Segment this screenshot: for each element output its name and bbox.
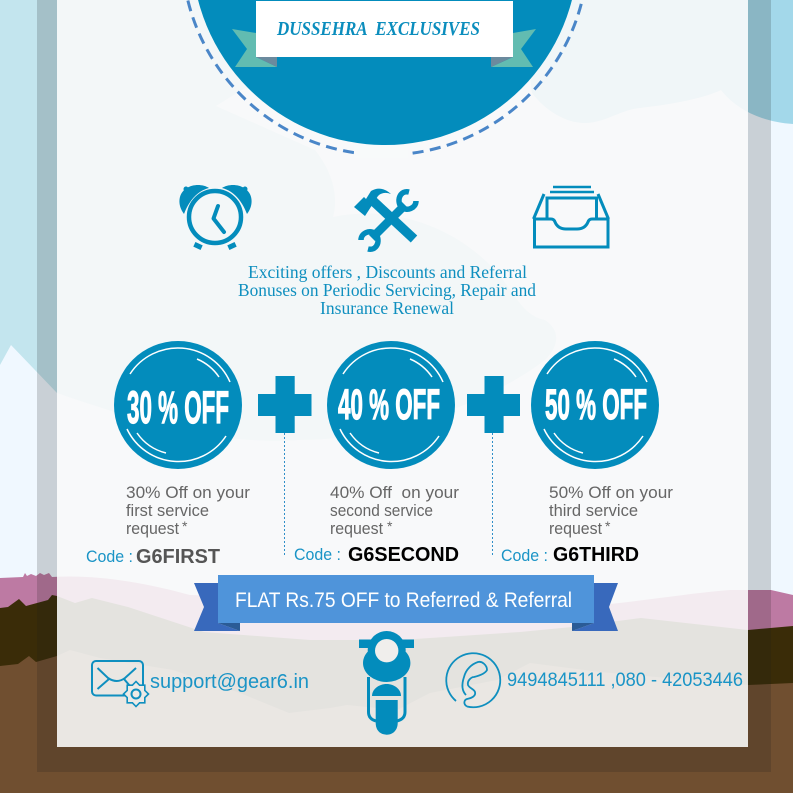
offer text 1: request — [126, 519, 179, 538]
offer text 1: 30% Off on your — [126, 483, 250, 502]
offer text 3: 50% Off on your — [549, 483, 673, 502]
icon: phone — [446, 653, 500, 707]
badge: 50% off: 50 % OFF — [545, 381, 647, 429]
badge: 30% off: 30 % OFF — [127, 382, 229, 433]
plus sign 1 — [258, 376, 312, 433]
offer text 2 — [330, 483, 459, 538]
icon: hammer and wrench — [354, 189, 416, 249]
offer text 2: request — [330, 519, 383, 538]
heading: DUSSEHRA EXCLUSIVES — [276, 18, 480, 40]
code 1 — [86, 546, 220, 568]
badge: 40% off: 40 % OFF — [338, 381, 440, 429]
badge: 50% off — [531, 341, 659, 469]
referral ribbon — [194, 575, 618, 631]
code 2 — [294, 544, 459, 566]
referral ribbon: FLAT Rs.75 OFF to Referred & Referral — [235, 588, 572, 612]
email address: support@gear6.in — [150, 670, 309, 693]
icon: alarm clock — [179, 185, 252, 250]
badge: 30% off — [114, 341, 242, 469]
intro text — [238, 262, 536, 318]
plus sign 2 — [467, 376, 520, 433]
dashed connector 2 — [492, 433, 494, 556]
badge: 40% off — [327, 341, 455, 469]
code 2: G6SECOND — [348, 544, 459, 566]
offer text 1: first service — [126, 501, 209, 520]
code 1: G6FIRST — [136, 546, 220, 568]
offer text 3: third service — [549, 501, 638, 520]
icon: inbox tray — [534, 187, 608, 247]
dashed connector 1 — [284, 433, 286, 556]
icon: email with gear — [92, 661, 148, 706]
offer text 1: * — [182, 518, 188, 534]
offer text 2: second service — [330, 501, 433, 520]
code 3: G6THIRD — [553, 544, 639, 566]
code 2: Code : — [294, 545, 341, 564]
intro text: Bonuses on Periodic Servicing, Repair and — [238, 280, 536, 300]
offer text 3: * — [605, 518, 611, 534]
intro text: Insurance Renewal — [320, 298, 454, 318]
header circle with banner — [182, 0, 588, 158]
code 3 — [501, 544, 639, 566]
offer text 1 — [126, 483, 250, 538]
offer text 3 — [549, 483, 673, 538]
code 1: Code : — [86, 547, 133, 566]
offer text 2: * — [387, 518, 393, 534]
offer text 2: 40% Off on your — [330, 483, 459, 502]
code 3: Code : — [501, 546, 548, 565]
phone numbers: 9494845111 ,080 - 42053446 — [507, 670, 743, 691]
offer text 3: request — [549, 519, 602, 538]
intro text: Exciting offers , Discounts and Referral — [248, 262, 527, 282]
icon: scooter — [359, 631, 414, 735]
